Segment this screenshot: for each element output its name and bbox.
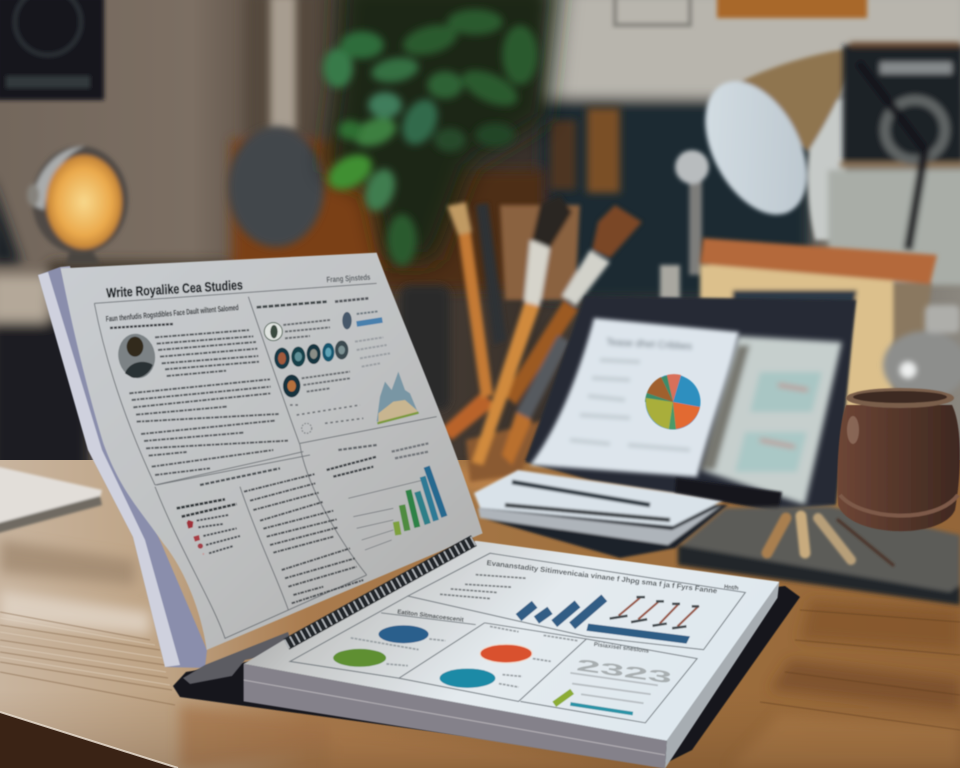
small text and mini colorful chart — [355, 337, 419, 423]
section heading: Faun thenfudis Rogstdibles Face Dault wiltent Salomed — [105, 303, 239, 324]
leather brown jar — [837, 388, 960, 531]
number panel: Pisiaxisel snesions — [593, 642, 650, 655]
open report binder — [38, 253, 800, 768]
page frame lines — [94, 283, 437, 638]
desk lamp — [660, 48, 858, 305]
section heading — [105, 303, 239, 328]
right page stack edges — [244, 541, 779, 768]
left page block edges — [38, 266, 207, 668]
desk front edge corner — [0, 712, 178, 768]
orange-brown wooden box — [232, 140, 380, 275]
top right caption: Frang Sjnsteds — [326, 273, 371, 284]
brush 3 — [472, 300, 540, 465]
spine fold — [183, 632, 294, 684]
blue bar chart — [519, 598, 604, 626]
black block on notebook — [675, 478, 782, 512]
green disc chart — [333, 649, 386, 667]
right wall posters and white box — [828, 42, 960, 285]
picture frames on top wall — [615, 0, 867, 25]
spiral binding — [286, 541, 474, 644]
center body text — [244, 474, 363, 603]
globe lamp glowing orange — [27, 146, 128, 264]
checklist with red bullets — [177, 499, 240, 555]
left page with case study — [61, 253, 483, 650]
dark bottle behind brushes — [400, 285, 450, 410]
brush 2 — [476, 203, 506, 345]
small blue status bar — [342, 311, 382, 329]
silver ball ornament — [883, 305, 960, 399]
panel heading text — [440, 559, 739, 599]
kraft storage box — [700, 238, 937, 420]
number panel: 2323 — [575, 656, 673, 687]
teal disc chart — [440, 669, 495, 688]
panel heading text: Hnt/h — [724, 584, 739, 592]
front paper with pie chart — [530, 318, 739, 477]
blue disc chart — [379, 625, 429, 643]
poster: top-left dark frame — [0, 0, 104, 100]
brush 5 — [516, 335, 570, 420]
dark panel behind stationery — [540, 100, 810, 300]
pie chart — [645, 374, 700, 430]
panel lines — [290, 553, 745, 723]
dark slate tray with gold pens — [678, 506, 960, 605]
brush holder and paint brushes — [440, 195, 642, 482]
binder cover — [173, 586, 800, 766]
left dark cabinet — [0, 315, 90, 475]
dark disc behind plant — [228, 127, 324, 247]
pen — [505, 505, 670, 520]
disc captions — [351, 626, 577, 687]
dark folder behind papers — [525, 296, 856, 510]
wooden desk surface — [0, 460, 960, 768]
potted plant — [322, 0, 560, 266]
closed laptop at left — [0, 466, 102, 534]
blue banner bar — [586, 624, 690, 644]
right page — [244, 541, 779, 741]
brush 4 — [504, 300, 578, 405]
brush 1 — [458, 226, 493, 398]
number panel — [554, 642, 673, 714]
bar chart — [327, 457, 444, 550]
panel heading text: Evananstadity Sitimvenicaia vinane f Jhpg sma f ja f Fyrs Fanne — [486, 559, 718, 595]
wood grain lines — [0, 610, 960, 730]
portrait photo — [115, 331, 159, 381]
middle profile column — [257, 298, 368, 433]
small labels: Eatiton Sitmacoescenit — [397, 610, 464, 624]
blurred background wall and furniture — [0, 0, 960, 480]
pen — [512, 482, 650, 505]
front paper with pie chart: Tease dhet Cribbes — [606, 337, 692, 353]
back paper with charts — [700, 336, 842, 505]
title: Write Royalike Cea Studies — [106, 277, 243, 301]
red disc chart — [480, 644, 532, 663]
thermometer icons row — [610, 597, 699, 628]
lower notebook with pens — [474, 470, 728, 558]
lower heading strip — [200, 443, 428, 485]
body text lines — [129, 330, 288, 475]
